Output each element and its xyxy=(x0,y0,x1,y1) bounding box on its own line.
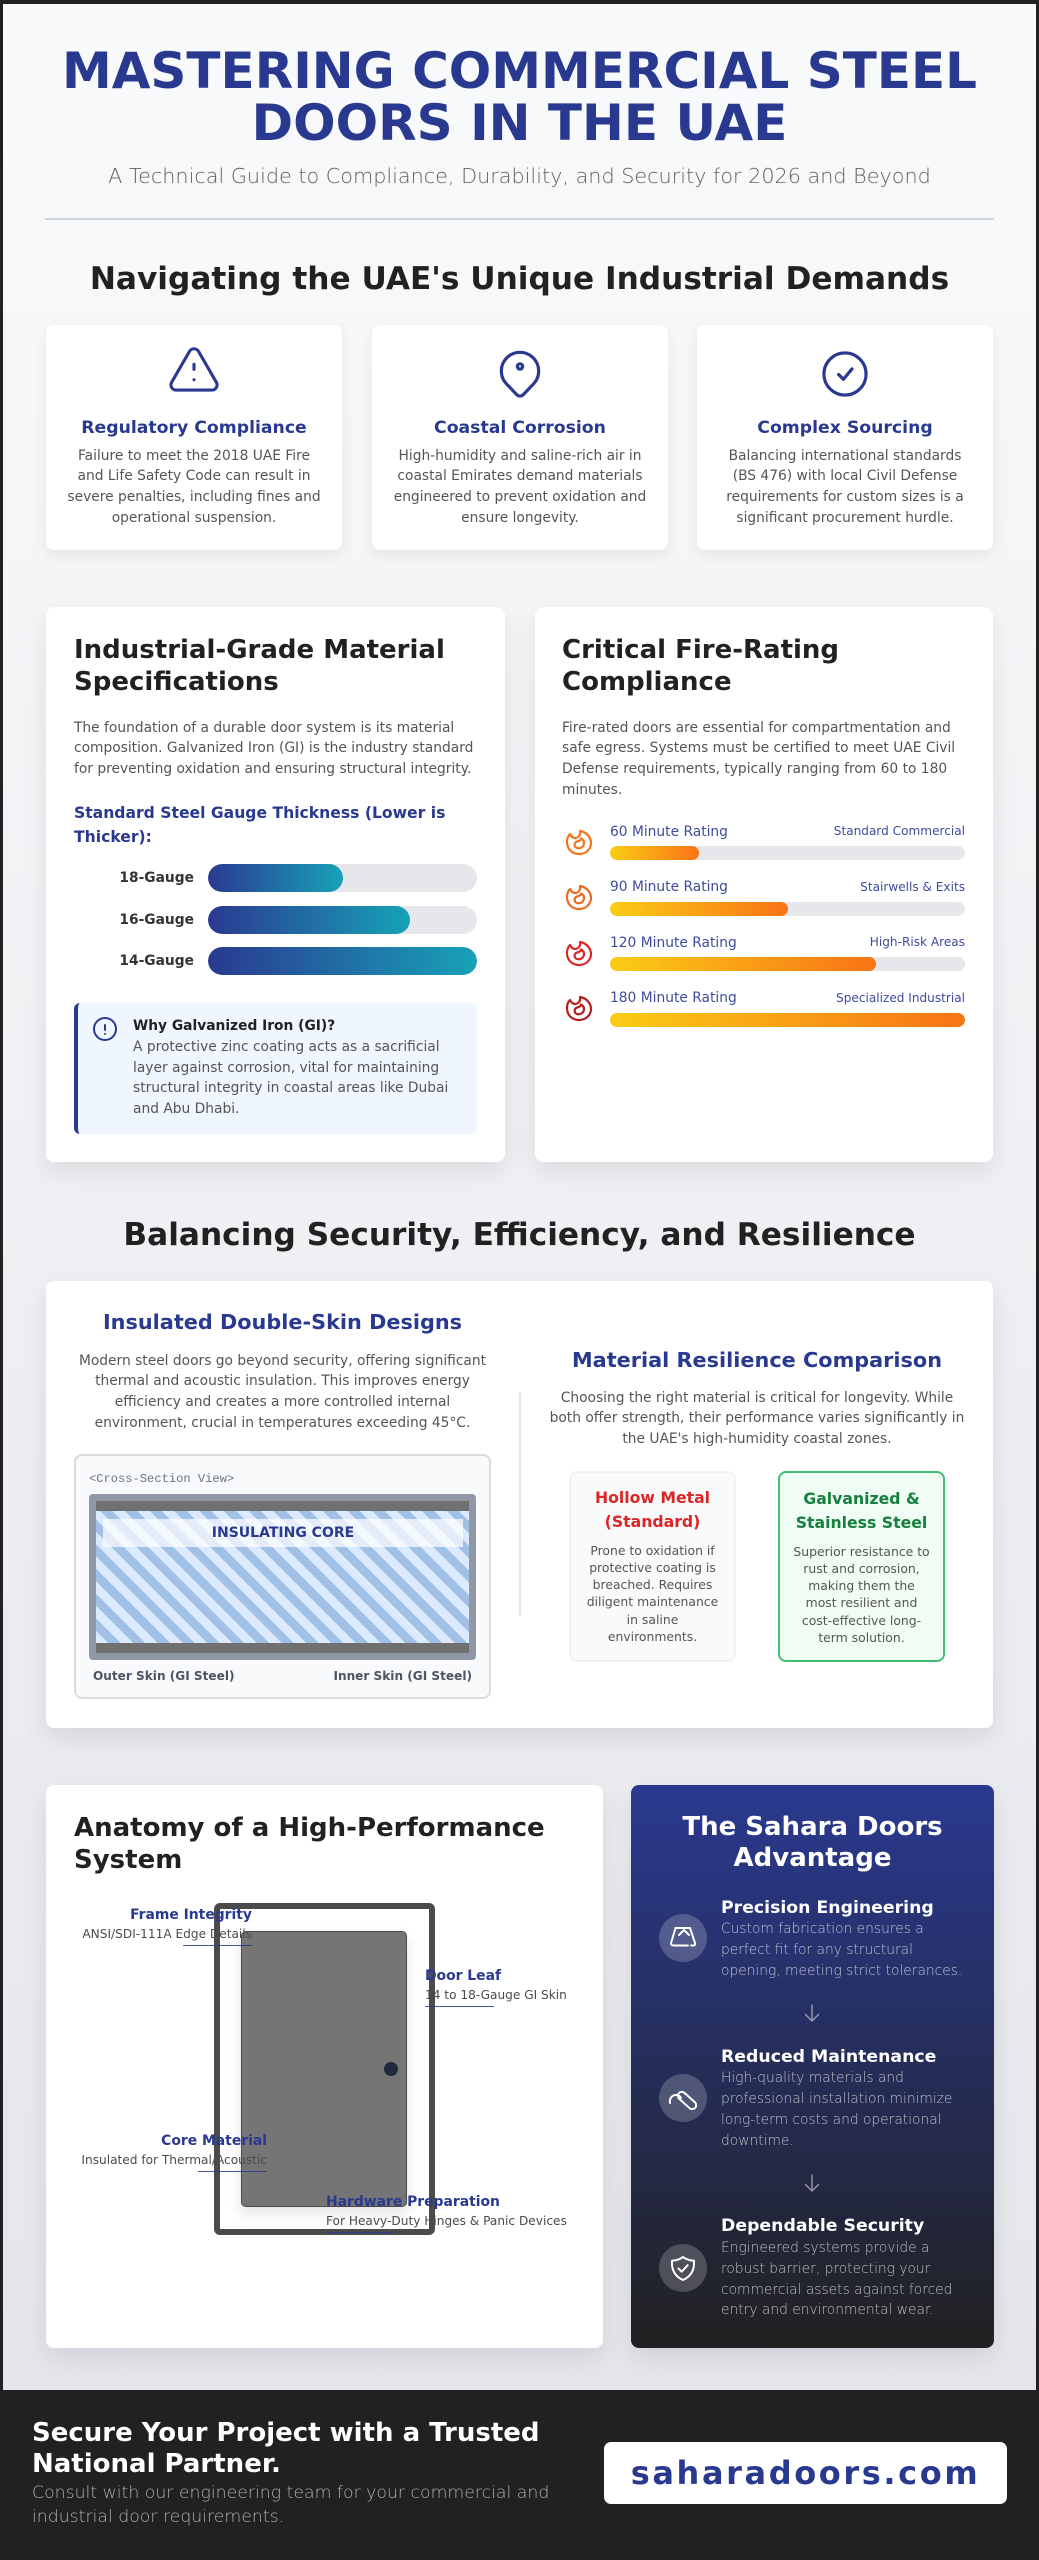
title: Reduced Maintenance xyxy=(721,2047,936,2067)
leader line xyxy=(425,2006,494,2007)
body text: insulation: Modern steel doors go beyond security, offering significant xyxy=(79,1353,486,1369)
body text: insulation: thermal and acoustic insulation. This improves energy xyxy=(95,1373,470,1389)
gauge chart title xyxy=(74,804,445,846)
website button xyxy=(604,2442,1007,2504)
diagram: door frame and leaf xyxy=(81,1903,567,2235)
sub-heading: material comparison: Material Resilience Comparison xyxy=(572,1348,942,1372)
comparison card: hollow metal xyxy=(569,1471,736,1662)
title: Dependable Security xyxy=(721,2216,924,2236)
label: 18-gauge: 18-Gauge xyxy=(119,870,194,886)
core label: INSULATING CORE xyxy=(212,1524,354,1540)
label: 180 Minute Rating xyxy=(610,990,737,1006)
card title: Coastal Corrosion xyxy=(434,418,606,438)
door frame xyxy=(214,1903,435,2235)
heading: Anatomy of a High-Performance xyxy=(74,1813,545,1843)
label: 90 Minute Rating xyxy=(610,879,728,895)
title: MASTERING COMMERCIAL STEEL xyxy=(62,42,977,100)
callout: hardware preparation xyxy=(326,2194,567,2233)
benefit: reduced maintenance xyxy=(631,2045,994,2155)
benefit: dependable security xyxy=(631,2214,994,2324)
body text: comparison: both offer strength, their performance varies significantly in xyxy=(550,1410,964,1426)
icon: precision xyxy=(659,1914,707,1962)
body text: comparison: Choosing the right material is critical for longevity. While xyxy=(561,1390,953,1406)
text: diligent maintenance xyxy=(587,1594,718,1609)
callout text: A protective zinc coating acts as a sacrificial xyxy=(133,1039,440,1055)
comparison card: galvanized and stainless steel xyxy=(778,1471,945,1662)
use case: Standard Commercial xyxy=(834,824,965,838)
body text: comparison xyxy=(550,1390,964,1447)
card text xyxy=(726,448,964,526)
footer call to action xyxy=(0,2390,1039,2560)
arrow xyxy=(804,2174,820,2192)
rating: 60 minute xyxy=(566,824,965,860)
footer text xyxy=(32,2481,549,2529)
card text: significant procurement hurdle. xyxy=(736,510,954,526)
inner skin xyxy=(96,1643,469,1653)
text xyxy=(721,1921,962,1979)
text: High-quality materials and xyxy=(721,2070,904,2086)
label: outer skin: Outer Skin (GI Steel) xyxy=(93,1669,234,1683)
sub-heading: insulated designs: Insulated Double-Skin Designs xyxy=(103,1310,462,1334)
callout text: 14 to 18-Gauge GI Skin xyxy=(425,1988,567,2002)
text: Custom fabrication ensures a xyxy=(721,1921,924,1937)
card text: ensure longevity. xyxy=(461,510,579,526)
card text: Balancing international standards xyxy=(729,448,961,464)
text: long-term costs and operational xyxy=(721,2112,942,2128)
text: professional installation minimize xyxy=(721,2091,952,2107)
text: robust barrier, protecting your xyxy=(721,2261,930,2277)
label: 60 Minute Rating xyxy=(610,824,728,840)
body text: insulation: environment, crucial in temperatures exceeding 45°C. xyxy=(95,1415,470,1431)
body text xyxy=(562,720,955,798)
caption: <Cross-Section View> xyxy=(89,1472,234,1486)
leader line xyxy=(326,2232,395,2233)
callout: core material xyxy=(81,2133,267,2172)
body text: for preventing oxidation and ensuring structural integrity. xyxy=(74,761,471,777)
callout text xyxy=(133,1018,448,1117)
section heading: security, efficiency, resilience: Balancing Security, Efficiency, and Resilience xyxy=(123,1217,916,1253)
door leaf xyxy=(241,1931,407,2207)
callout title: Door Leaf xyxy=(425,1968,501,1984)
panel: the sahara doors advantage xyxy=(631,1785,994,2348)
icon: flame xyxy=(566,940,592,966)
icon: flame xyxy=(566,884,592,910)
title: Precision Engineering xyxy=(721,1898,934,1918)
bar chart: steel gauge thickness xyxy=(119,864,477,975)
card text: engineered to prevent oxidation and xyxy=(394,489,646,505)
text: entry and environmental wear. xyxy=(721,2302,934,2318)
card text: severe penalties, including fines and xyxy=(67,489,321,505)
heading xyxy=(682,1812,943,1873)
heading: Critical Fire-Rating xyxy=(562,635,839,665)
title: Stainless Steel xyxy=(796,1513,927,1532)
text: cost-effective long- xyxy=(802,1613,921,1628)
bar: 14-gauge xyxy=(208,947,477,975)
heading: Specifications xyxy=(74,667,279,697)
outer skin xyxy=(96,1501,469,1511)
footer heading: National Partner. xyxy=(32,2449,281,2479)
title xyxy=(62,42,977,152)
card text: High-humidity and saline-rich air in xyxy=(398,448,642,464)
callout text: layer against corrosion, vital for maintaining xyxy=(133,1060,439,1076)
text: environments. xyxy=(608,1629,697,1644)
text: in saline xyxy=(627,1612,678,1627)
door handle xyxy=(384,2062,398,2076)
title xyxy=(796,1489,927,1532)
icon: location pin xyxy=(500,350,540,398)
text: breached. Requires xyxy=(593,1577,712,1592)
icon: flame xyxy=(566,996,592,1022)
callout title: Frame Integrity xyxy=(130,1907,252,1923)
card text: operational suspension. xyxy=(112,510,276,526)
text: most resilient and xyxy=(806,1595,917,1610)
footer heading: Secure Your Project with a Trusted xyxy=(32,2418,540,2448)
text xyxy=(587,1542,718,1644)
section heading: industrial demands: Navigating the UAE's Unique Industrial Demands xyxy=(90,261,949,297)
body text: Fire-rated doors are essential for compartmentation and xyxy=(562,720,951,736)
label: inner skin: Inner Skin (GI Steel) xyxy=(333,1669,472,1683)
card text: (BS 476) with local Civil Defense xyxy=(733,468,957,484)
rating: 180 minute xyxy=(566,990,965,1027)
arrow xyxy=(804,2004,820,2022)
panel: regulatory compliance xyxy=(46,325,342,550)
panel: fire-rating compliance xyxy=(535,607,993,1162)
panel: door anatomy xyxy=(46,1785,603,2348)
callout: frame integrity xyxy=(82,1907,252,1946)
heading: The Sahara Doors xyxy=(682,1812,943,1842)
text: commercial assets against forced xyxy=(721,2282,952,2298)
callout: door leaf xyxy=(425,1968,567,2007)
callout text: and Abu Dhabi. xyxy=(133,1101,239,1117)
title: (Standard) xyxy=(605,1512,700,1531)
heading: System xyxy=(74,1845,182,1875)
card title: Regulatory Compliance xyxy=(81,418,307,438)
bar: 16-gauge xyxy=(208,906,477,934)
card text: and Life Safety Code can result in xyxy=(78,468,310,484)
cross-section drawing xyxy=(89,1494,476,1660)
body text: comparison: the UAE's high-humidity coastal zones. xyxy=(622,1431,892,1447)
panel: coastal corrosion xyxy=(372,325,668,550)
text: downtime. xyxy=(721,2133,794,2149)
title: Galvanized & xyxy=(803,1489,920,1508)
text: Prone to oxidation if xyxy=(590,1542,715,1558)
heading: Compliance xyxy=(562,667,732,697)
icon: check circle xyxy=(822,351,868,397)
body text: Defense requirements, typically ranging from 60 to 180 xyxy=(562,761,947,777)
heading xyxy=(562,635,839,697)
label: 120 Minute Rating xyxy=(610,934,737,950)
card text: Failure to meet the 2018 UAE Fire xyxy=(78,448,310,464)
progress bar xyxy=(610,957,965,971)
panel: complex sourcing xyxy=(697,325,993,550)
website button: saharadoors.com xyxy=(631,2454,980,2492)
text: protective coating is xyxy=(589,1560,716,1575)
callout title: Core Material xyxy=(161,2133,267,2149)
body text: safe egress. Systems must be certified to meet UAE Civil xyxy=(562,740,955,756)
body text: minutes. xyxy=(562,782,622,798)
text: making them the xyxy=(808,1578,915,1593)
card text: coastal Emirates demand materials xyxy=(397,468,643,484)
gauge chart title: Standard Steel Gauge Thickness (Lower is xyxy=(74,804,445,822)
body text xyxy=(74,720,473,777)
text: rust and corrosion, xyxy=(803,1561,920,1576)
label: 16-gauge: 16-Gauge xyxy=(119,912,194,928)
heading: Advantage xyxy=(734,1843,891,1873)
bar: 18-gauge xyxy=(208,864,477,892)
callout text: For Heavy-Duty Hinges & Panic Devices xyxy=(326,2214,567,2228)
leader line xyxy=(198,2171,267,2172)
use case: High-Risk Areas xyxy=(870,935,965,949)
label: 14-gauge: 14-Gauge xyxy=(119,953,194,969)
core label xyxy=(103,1518,463,1546)
body text: The foundation of a durable door system is its material xyxy=(74,720,454,736)
footer text: industrial door requirements. xyxy=(32,2507,284,2527)
body text: composition. Galvanized Iron (GI) is the industry standard xyxy=(74,740,473,756)
progress bar xyxy=(610,902,965,916)
text: Superior resistance to xyxy=(793,1544,930,1558)
rating: 90 minute xyxy=(566,879,965,916)
icon: wrench xyxy=(659,2074,707,2122)
diagram: door cross-section xyxy=(74,1454,491,1699)
text: Engineered systems provide a xyxy=(721,2240,929,2256)
callout text: Insulated for Thermal/Acoustic xyxy=(81,2153,267,2167)
progress bar xyxy=(610,1012,965,1026)
heading xyxy=(74,635,445,697)
card text xyxy=(394,448,646,526)
rating: 120 minute xyxy=(566,934,965,971)
title xyxy=(595,1488,710,1531)
title: DOORS IN THE UAE xyxy=(252,94,787,152)
heading xyxy=(74,1813,545,1875)
gauge chart title: Thicker): xyxy=(74,828,152,846)
callout text: Why Galvanized Iron (GI)? xyxy=(133,1018,335,1034)
callout: why galvanized iron xyxy=(74,1002,477,1134)
text xyxy=(793,1544,930,1645)
callout title: Hardware Preparation xyxy=(326,2194,500,2210)
callout text: structural integrity in coastal areas like Dubai xyxy=(133,1080,448,1096)
icon: info circle xyxy=(93,1017,117,1041)
text: opening, meeting strict tolerances. xyxy=(721,1963,962,1979)
leader line xyxy=(183,1945,252,1946)
panel: material specifications xyxy=(46,607,505,1162)
icon: warning triangle xyxy=(169,347,219,392)
icon: flame xyxy=(566,830,592,856)
body text: insulation: efficiency and creates a more controlled internal xyxy=(115,1394,450,1410)
title: Hollow Metal xyxy=(595,1488,710,1507)
use case: Stairwells & Exits xyxy=(860,880,965,894)
card text xyxy=(67,448,321,526)
insulating core xyxy=(96,1511,469,1643)
progress bar xyxy=(610,846,965,860)
body text: insulation xyxy=(79,1353,486,1431)
callout text: ANSI/SDI-111A Edge Details xyxy=(82,1927,252,1941)
footer heading xyxy=(32,2418,540,2480)
panel: insulation and material comparison xyxy=(46,1281,993,1728)
benefit: precision engineering xyxy=(659,1898,962,1979)
text xyxy=(721,2068,952,2151)
text: perfect fit for any structural xyxy=(721,1942,913,1958)
use case: Specialized Industrial xyxy=(836,990,965,1004)
subtitle: A Technical Guide to Compliance, Durability, and Security for 2026 and Beyond xyxy=(108,164,931,188)
text xyxy=(721,2238,952,2321)
heading: Industrial-Grade Material xyxy=(74,635,445,665)
footer text: Consult with our engineering team for your commercial and xyxy=(32,2483,549,2503)
text: term solution. xyxy=(818,1630,905,1645)
card title: Complex Sourcing xyxy=(757,418,933,438)
header: title and subtitle xyxy=(62,42,977,188)
card text: requirements for custom sizes is a xyxy=(726,489,964,505)
icon: shield xyxy=(659,2244,707,2292)
